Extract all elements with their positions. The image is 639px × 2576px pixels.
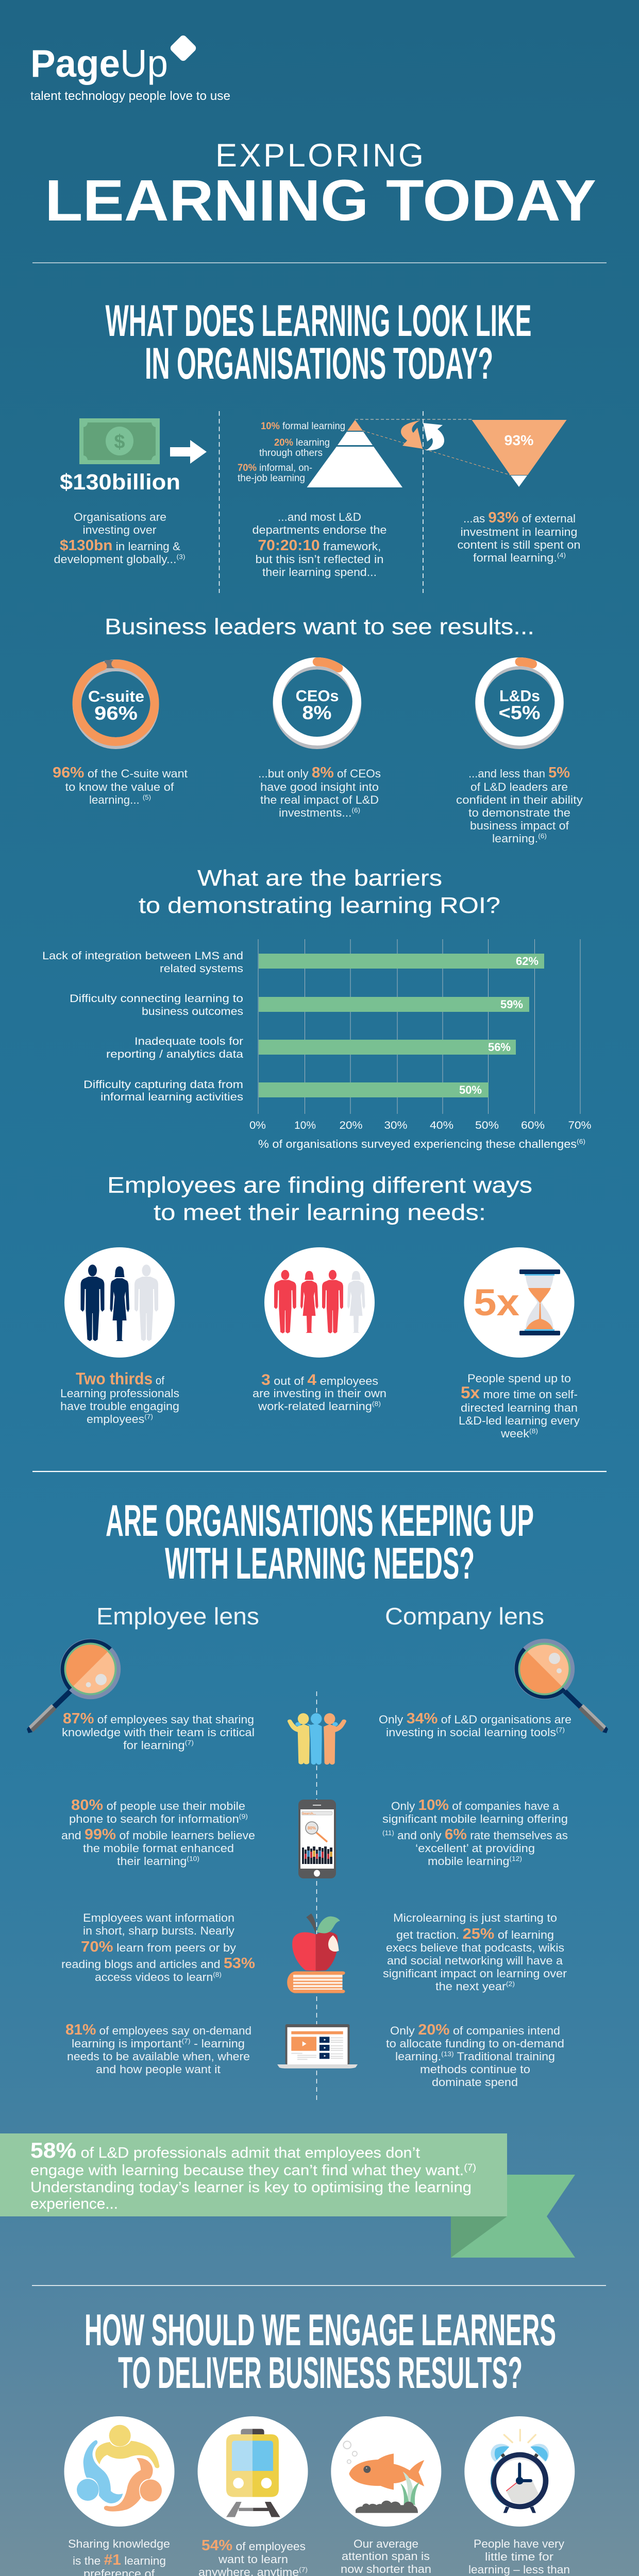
text: employee lens 81%: 81% of employees say on-demand xyxy=(65,2022,251,2038)
bar chart: barriers xyxy=(42,939,592,1150)
text: employee lens 81%: (7) xyxy=(181,2037,191,2045)
bar 56% xyxy=(259,1040,516,1055)
bar labels xyxy=(42,950,243,1103)
text block: are investing in their own xyxy=(253,1387,386,1400)
text: employee lens 70% and 53%: access videos to learn xyxy=(95,1971,207,1984)
text: company lens 10% and 6%: mobile learning xyxy=(428,1855,505,1868)
axis ticks: 10% xyxy=(294,1120,316,1131)
text: company lens 20%: methods continue to xyxy=(420,2063,530,2076)
text block: (6) xyxy=(351,806,360,814)
heading: how should we engage learners xyxy=(85,2306,556,2398)
heading: are organisations keeping up xyxy=(106,1496,534,1588)
text block: Learning professionals xyxy=(60,1387,179,1400)
text: company lens 10% and 6% xyxy=(382,1797,568,1868)
text: employee lens 87% xyxy=(62,1710,255,1752)
panel: CEOs 8% ring xyxy=(258,657,381,819)
text: company lens 10% and 6%: (11) xyxy=(382,1829,394,1837)
row: sharing knowledge xyxy=(62,1710,571,1765)
ring chart: CEOs xyxy=(296,687,339,705)
text block xyxy=(459,1372,580,1440)
text block: directed learning than xyxy=(461,1401,578,1414)
text block xyxy=(60,1369,179,1426)
text block: Two thirds of xyxy=(76,1369,165,1388)
text block: Sharing knowledge xyxy=(68,2537,170,2550)
text block: the real impact of L&D xyxy=(260,793,379,806)
text block: 96% of the C-suite want xyxy=(53,765,188,781)
text block xyxy=(456,765,583,845)
text block: formal learning. xyxy=(473,551,551,564)
axis ticks: 40% xyxy=(430,1120,453,1131)
subheading: company lens: Company lens xyxy=(385,1603,544,1630)
text block: week xyxy=(501,1427,527,1440)
logo: PageUp xyxy=(30,34,230,103)
axis ticks: 20% xyxy=(339,1120,363,1131)
text: company lens 10% and 6%: (12) xyxy=(509,1855,522,1862)
text block xyxy=(336,2537,435,2576)
text: company lens 20%: dominate spend xyxy=(432,2076,518,2089)
text block: their learning spend... xyxy=(262,566,377,579)
icon: apple on book xyxy=(287,1913,345,1993)
text block: Our average xyxy=(354,2537,418,2550)
text: employee lens 81%: learning is important xyxy=(72,2037,174,2050)
text: company lens 25%: get traction. 25% of learning xyxy=(396,1926,554,1942)
text block xyxy=(258,765,381,819)
row: on-demand xyxy=(65,2022,564,2089)
logo wordmark: PageUp xyxy=(30,42,168,85)
panel: 93% formal learning investment xyxy=(355,419,580,564)
heading: what does learning look like xyxy=(105,296,532,388)
callout banner: 58%: engage with learning because they can’t find what they want. xyxy=(30,2162,433,2179)
text block xyxy=(68,2537,170,2576)
text: company lens 20%: (13) xyxy=(441,2050,454,2058)
axis ticks: 60% xyxy=(521,1120,545,1131)
inverted triangle: 93% xyxy=(504,432,534,448)
text: employee lens 80% and 99%: the mobile format enhanced xyxy=(83,1842,234,1855)
axis ticks: 70% xyxy=(568,1120,592,1131)
bar labels: Inadequate tools for xyxy=(134,1036,243,1047)
text: company lens 25%: significant impact on learning over xyxy=(383,1967,567,1980)
text: company lens 25%: execs believe that podcasts, wikis xyxy=(386,1941,564,1954)
text: employee lens 87%: (7) xyxy=(185,1739,194,1747)
icon: three people in circle xyxy=(64,1247,175,1358)
text block: learning. xyxy=(492,832,535,845)
text block: ...but only 8% of CEOs xyxy=(258,765,381,781)
text: company lens 34%: investing in social learning tools xyxy=(386,1726,545,1739)
text: employee lens 80% and 99% xyxy=(61,1797,255,1868)
text: employee lens 87%: for learning xyxy=(123,1739,180,1752)
icon: hourglass in circle xyxy=(464,1247,574,1358)
text: company lens 20%: Traditional training xyxy=(454,2050,555,2063)
text: company lens 10% and 6%: 6% rate themselves as xyxy=(445,1826,565,1843)
heading: employees finding different ways: Employees are finding different ways xyxy=(107,1173,532,1198)
ring chart: 8% xyxy=(302,702,332,723)
text block: Organisations are xyxy=(74,511,166,523)
text block: L&D-led learning every xyxy=(459,1414,580,1427)
text block: investment in learning xyxy=(461,526,577,538)
pyramid labels xyxy=(238,421,345,484)
text block xyxy=(466,2537,572,2576)
logo diamond xyxy=(169,34,197,62)
text: company lens 10% and 6%: and only xyxy=(394,1829,445,1842)
icon: train circle xyxy=(198,2416,308,2527)
panel: $130 billion investment xyxy=(54,418,207,566)
text: company lens 25%: and social networking will have a xyxy=(387,1954,563,1967)
pyramid labels: 20% learning xyxy=(274,437,330,448)
ring chart xyxy=(273,657,361,749)
icon: dollar bill xyxy=(79,418,160,464)
text block: attention span is xyxy=(342,2550,430,2563)
panel: L&Ds less than 5% ring xyxy=(456,657,583,845)
text block: employees xyxy=(87,1413,141,1426)
text: employee lens 87%: 87% of employees say that sharing xyxy=(63,1710,254,1727)
text block: (7) xyxy=(144,1413,153,1420)
text block: (6) xyxy=(538,832,547,840)
text block: development globally... xyxy=(54,553,169,566)
axis ticks: 0% xyxy=(249,1120,266,1131)
bar 62% xyxy=(259,954,544,969)
text: employee lens 80% and 99%: 80% of people use their mobile xyxy=(71,1797,245,1814)
icon: magnifier left xyxy=(27,1639,121,1733)
text: company lens 20%: to allocate funding to on-demand xyxy=(386,2037,564,2050)
text block: 54% of employees xyxy=(201,2537,306,2554)
panel: 5x more time xyxy=(459,1247,580,1440)
icon: phone with search screen xyxy=(298,1800,336,1878)
text: employee lens 80% and 99%: their learning xyxy=(117,1855,182,1868)
text: employee lens 80% and 99%: and 99% of mobile learners believe xyxy=(61,1826,255,1843)
text: company lens 34% xyxy=(379,1710,571,1739)
text block xyxy=(253,511,386,579)
dashed connectors xyxy=(355,419,472,420)
row: microlearning xyxy=(61,1911,567,1993)
ring chart xyxy=(73,659,159,749)
heading: employees finding different ways xyxy=(107,1173,532,1225)
text block: have good insight into xyxy=(260,781,379,793)
text: employee lens 70% and 53%: reading blogs and articles and 53% xyxy=(61,1955,255,1972)
text: employee lens 70% and 53%: Employees want information xyxy=(83,1911,234,1924)
heading: business leaders: Business leaders want to see results... xyxy=(105,614,534,639)
text: company lens 20%: Only 20% of companies intend xyxy=(390,2022,560,2038)
text block xyxy=(54,511,186,566)
row: mobile xyxy=(61,1797,568,1878)
ring chart xyxy=(475,657,564,749)
callout banner: 58%: (7) xyxy=(464,2162,476,2173)
text block: People have very xyxy=(474,2537,564,2550)
text: company lens 10% and 6%: ‘excellent’ at providing xyxy=(415,1842,535,1855)
text: employee lens 80% and 99%: phone to search for information xyxy=(69,1812,226,1825)
text: employee lens 81%: - learning xyxy=(191,2037,245,2050)
text block: (8) xyxy=(529,1427,538,1435)
text: employee lens 80% and 99%: (9) xyxy=(239,1812,248,1820)
text: employee lens 70% and 53%: in short, sharp bursts. Nearly xyxy=(83,1924,234,1937)
ring chart: <5% xyxy=(499,702,540,723)
text: employee lens 80% and 99%: (10) xyxy=(187,1855,199,1862)
text block: ...as 93% of external xyxy=(463,510,576,526)
text block: now shorter than xyxy=(341,2563,431,2575)
text block: 70:20:10 framework, xyxy=(258,537,381,554)
text block: (7) xyxy=(299,2566,308,2573)
text block: (8) xyxy=(372,1400,381,1408)
text block: is the #1 learning xyxy=(73,2552,166,2568)
heading: barriers to ROI xyxy=(139,866,500,918)
text: company lens 25%: Microlearning is just starting to xyxy=(393,1911,557,1924)
ring chart: 96% xyxy=(94,703,138,724)
bar labels: related systems xyxy=(160,963,243,975)
bar labels: Difficulty capturing data from xyxy=(83,1079,243,1091)
panel: C-suite 96% ring xyxy=(53,659,188,806)
icon: cycle arrows xyxy=(401,420,444,450)
bar 59%: 59% xyxy=(500,998,523,1011)
text: employee lens 81%: needs to be available when, where xyxy=(67,2050,250,2063)
pyramid labels: through others xyxy=(259,448,323,459)
text block: $130bn in learning & xyxy=(60,537,180,554)
icon: dollar bill: $ xyxy=(114,431,125,453)
bar 59% xyxy=(259,997,529,1012)
title xyxy=(45,138,596,233)
icon: goldfish circle xyxy=(331,2416,441,2527)
text block: investments... xyxy=(279,806,349,819)
text: employee lens 70% and 53%: 70% learn from peers or by xyxy=(81,1939,236,1955)
text block: content is still spent on xyxy=(458,538,580,551)
pyramid labels: the-job learning xyxy=(238,473,305,484)
text: company lens 10% and 6%: Only 10% of companies have a xyxy=(391,1797,560,1814)
text: employee lens 81% xyxy=(65,2022,251,2076)
text: employee lens 70% and 53% xyxy=(61,1911,255,1984)
text block: learning... xyxy=(89,793,139,806)
text: employee lens 70% and 53%: (8) xyxy=(213,1971,222,1978)
text block: 5x more time on self- xyxy=(461,1383,578,1402)
axis ticks: 50% xyxy=(475,1120,499,1131)
callout banner: 58%: 58% of L&D professionals admit that employees don’t xyxy=(30,2138,420,2162)
callout banner: 58%: experience... xyxy=(30,2196,118,2212)
icon: magnifier right xyxy=(514,1639,608,1733)
text block: ...and most L&D xyxy=(278,511,361,523)
icon: hourglass in circle: 5x xyxy=(474,1282,519,1324)
text: company lens 25%: the next year xyxy=(435,1980,501,1993)
bar 56%: 56% xyxy=(488,1041,511,1054)
icon: team of three xyxy=(288,1713,346,1765)
text: company lens 20% xyxy=(386,2022,564,2089)
icon: four people in circle xyxy=(264,1247,375,1358)
text block: departments endorse the xyxy=(253,523,386,536)
text block: to demonstrate the xyxy=(468,806,570,819)
bar labels: Lack of integration between LMS and xyxy=(42,950,243,962)
text block: People spend up to xyxy=(467,1372,571,1385)
panel: two thirds xyxy=(60,1247,179,1426)
subheading: employee lens: Employee lens xyxy=(96,1603,259,1630)
text: company lens 20%: learning. xyxy=(395,2050,439,2063)
bar 50% xyxy=(259,1082,489,1097)
text block xyxy=(53,765,188,806)
column: mobile anywhere xyxy=(198,2416,308,2576)
text block: ...and less than 5% xyxy=(468,765,570,781)
bar labels: business outcomes xyxy=(142,1006,243,1018)
axis ticks: 30% xyxy=(384,1120,407,1131)
callout banner: 58%: Understanding today’s learner is key to optimising the learning xyxy=(30,2179,472,2196)
bar labels: informal learning activities xyxy=(100,1091,243,1103)
callout banner: 58% xyxy=(0,2133,575,2258)
text block xyxy=(253,1371,386,1413)
bar labels: Difficulty connecting learning to xyxy=(70,993,243,1005)
big number: $130billion xyxy=(60,470,180,495)
icon: laptop xyxy=(277,2024,358,2069)
text block xyxy=(458,510,580,564)
text block: confident in their ability xyxy=(456,793,583,806)
pyramid xyxy=(307,420,402,487)
text block: little time for xyxy=(485,2550,553,2563)
icon: three people circle xyxy=(64,2416,174,2527)
icon: phone with search screen: 80% xyxy=(308,1826,316,1831)
axis title: (6) xyxy=(577,1138,585,1145)
text: employee lens 87%: knowledge with their team is critical xyxy=(62,1726,255,1739)
column: sharing knowledge xyxy=(64,2416,174,2576)
column: little time xyxy=(464,2416,575,2576)
text: company lens 25% xyxy=(383,1911,567,1993)
column: attention span xyxy=(331,2416,441,2576)
text: company lens 34%: Only 34% of L&D organisations are xyxy=(379,1710,571,1727)
ring chart: C-suite xyxy=(88,687,144,705)
text block: but this isn’t reflected in xyxy=(256,553,383,566)
text block: to know the value of xyxy=(65,781,174,793)
icon: phone with search screen: Search... xyxy=(302,1812,316,1816)
text block xyxy=(198,2537,308,2576)
text block: 3 out of 4 employees xyxy=(261,1371,378,1388)
text block: (5) xyxy=(143,793,151,801)
text block: of L&D leaders are xyxy=(470,781,568,793)
logo tagline: talent technology people love to use xyxy=(30,89,230,103)
heading: employees finding different ways: to meet their learning needs: xyxy=(154,1200,486,1225)
axis title: % of organisations surveyed experiencing these challenges xyxy=(258,1138,556,1150)
icon: alarm clock circle xyxy=(464,2416,575,2527)
bar 62%: 62% xyxy=(516,955,539,968)
panel: 3 out of 4 xyxy=(253,1247,386,1413)
text: company lens 10% and 6%: significant mobile learning offering xyxy=(382,1812,568,1825)
text block: business impact of xyxy=(470,819,569,832)
text block: (3) xyxy=(177,553,186,561)
title line: exploring: EXPLORING xyxy=(215,138,424,174)
text block: work-related learning xyxy=(258,1400,364,1413)
title line: learning today: LEARNING TODAY xyxy=(45,168,596,233)
ring chart: L&Ds xyxy=(499,687,540,705)
bar 50%: 50% xyxy=(459,1083,482,1096)
inverted triangle xyxy=(472,420,567,487)
heading: barriers to ROI: What are the barriers xyxy=(197,866,442,891)
icon: arrow xyxy=(170,440,207,464)
axis ticks xyxy=(249,1120,592,1131)
heading: barriers to ROI: to demonstrating learning ROI? xyxy=(139,893,500,918)
text block: have trouble engaging xyxy=(60,1400,179,1413)
text: company lens 34%: (7) xyxy=(556,1726,565,1734)
text block: want to learn xyxy=(218,2553,288,2566)
panel: 70:20:10 framework pyramid xyxy=(238,420,402,579)
bar labels: reporting / analytics data xyxy=(106,1048,243,1060)
text block: learning – less than xyxy=(468,2563,570,2576)
pyramid labels: 10% formal learning xyxy=(261,421,345,432)
text block: investing over xyxy=(82,523,157,536)
text: company lens 25%: (2) xyxy=(506,1980,515,1988)
pyramid labels: 70% informal, on- xyxy=(238,463,312,473)
text: employee lens 81%: and how people want it xyxy=(96,2063,221,2076)
text block: (4) xyxy=(557,551,566,559)
